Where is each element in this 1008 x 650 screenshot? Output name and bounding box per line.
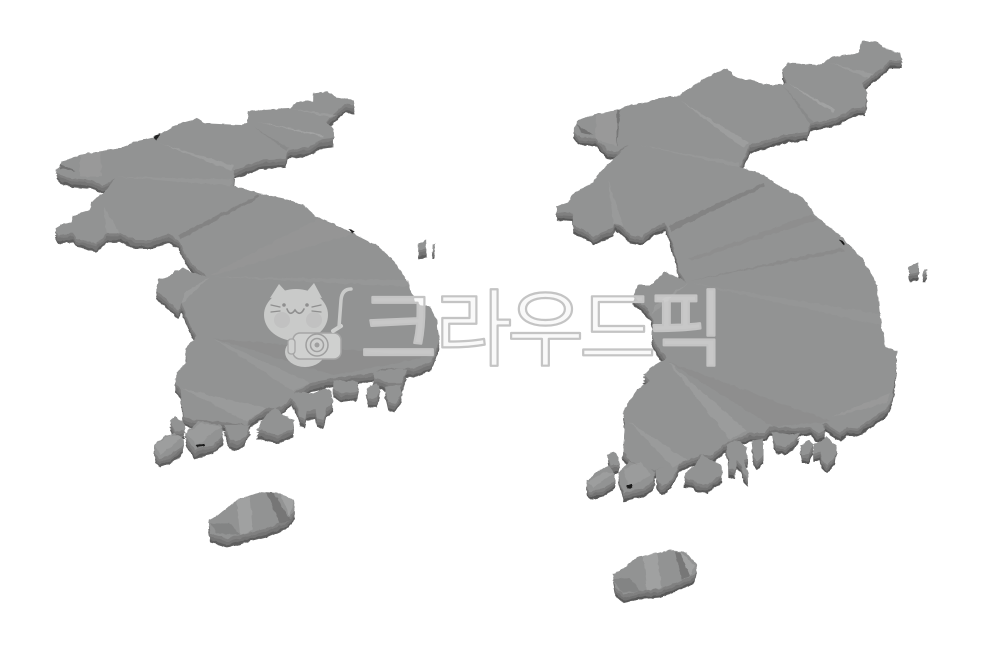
map: Korean peninsula, left bbox=[55, 92, 439, 547]
logo bracket stroke bbox=[339, 289, 351, 327]
right map surface facets bbox=[577, 63, 890, 593]
left map surface facets bbox=[60, 108, 430, 535]
watermark logo bbox=[264, 283, 725, 377]
map: Korean peninsula, right bbox=[556, 41, 927, 603]
logo wordmark: 크라우드픽 bbox=[360, 283, 725, 377]
icon: cat with camera bbox=[264, 283, 341, 367]
